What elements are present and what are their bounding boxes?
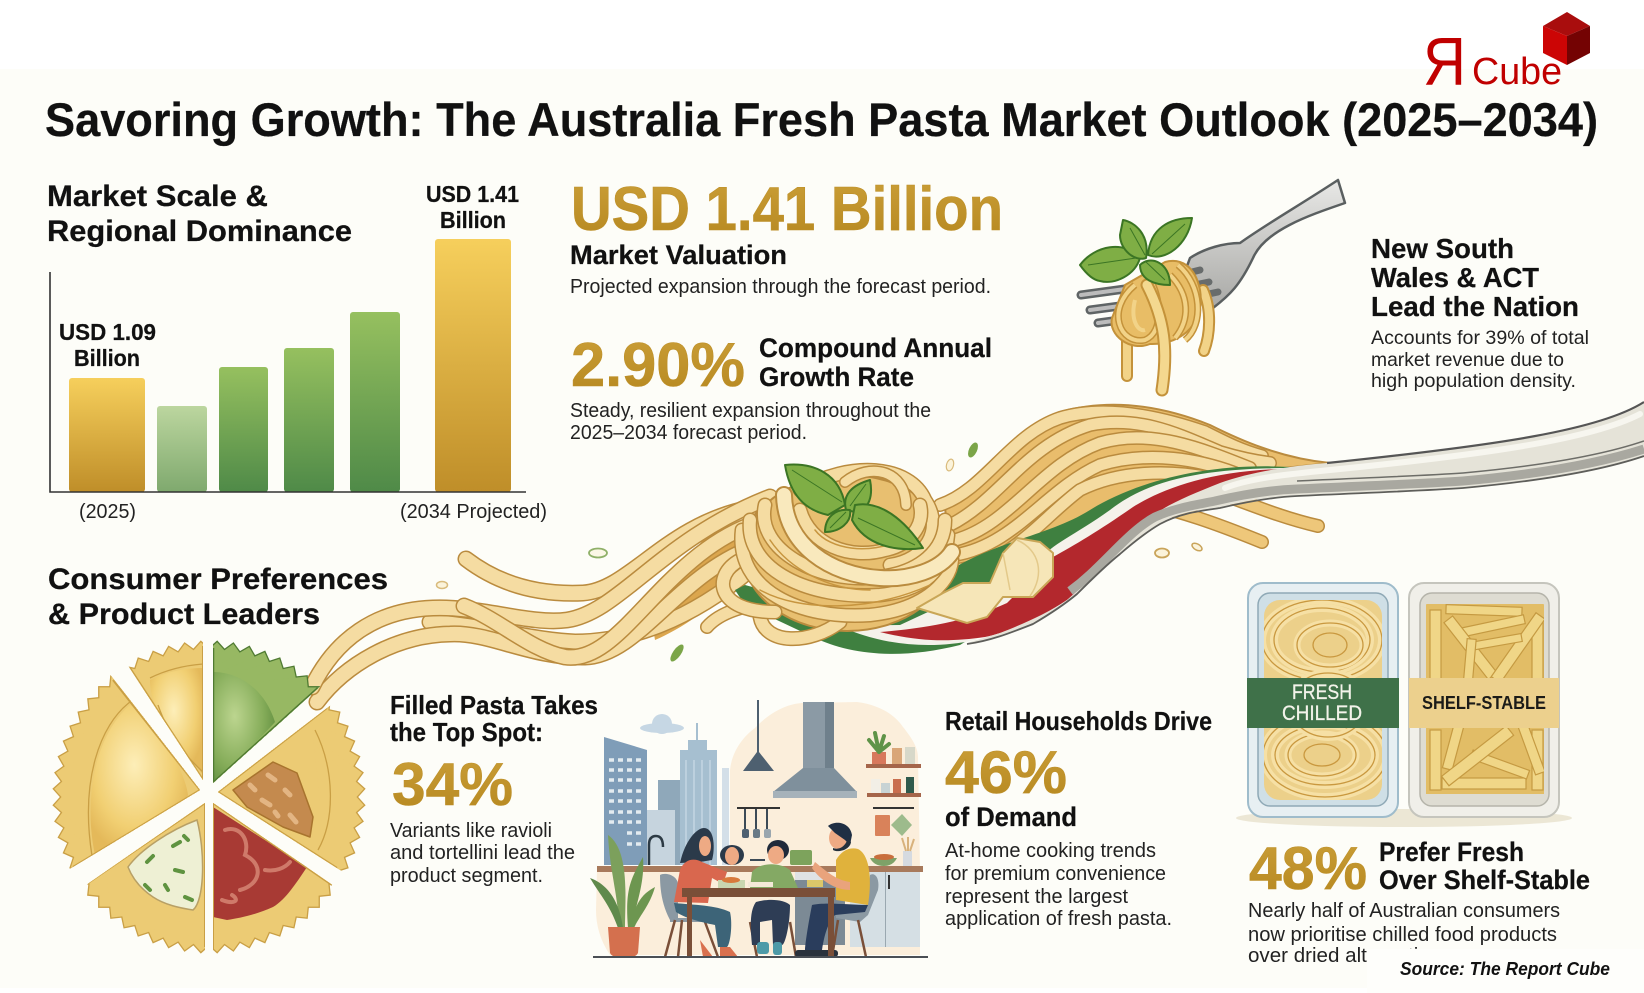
potted plant — [590, 835, 655, 957]
segment: green spinach — [213, 640, 320, 783]
text: New South Wales and ACT — [1371, 233, 1589, 392]
logo: RCube — [1423, 12, 1590, 100]
icon: basil on nest — [785, 465, 923, 549]
tray: fresh chilled: CHILLED — [1282, 702, 1362, 725]
left pasta strands — [312, 497, 780, 702]
text: New South Wales and ACT: Wales & ACT — [1371, 262, 1539, 293]
tray: shelf-stable: SHELF-STABLE — [1422, 693, 1546, 713]
bar chart: (2025) — [79, 501, 136, 523]
text: fresh preference stat: Prefer Fresh — [1379, 837, 1524, 867]
tray: shelf-stable — [1409, 583, 1559, 817]
pasta crumbs and herb flecks — [436, 441, 1203, 663]
panel: consumer preferences heading: Consumer Preferences — [48, 563, 388, 596]
tray: fresh chilled — [1247, 583, 1399, 817]
pasta nest — [723, 470, 952, 639]
city skyline — [604, 714, 729, 865]
stat: market valuation — [570, 175, 1003, 298]
text: New South Wales and ACT: Accounts for 39% of total — [1371, 327, 1589, 349]
text: fresh preference stat: over dried alternatives. — [1248, 945, 1456, 967]
shelves with jars — [866, 733, 921, 797]
segment: meat and vegetable filling — [218, 706, 366, 871]
logo: RCube: Я — [1423, 24, 1466, 100]
stat: CAGR: 2025–2034 forecast period. — [570, 422, 807, 444]
text: filled pasta stat: and tortellini lead the — [390, 842, 575, 864]
text: retail households stat: of Demand — [945, 802, 1077, 832]
kitchen wall — [596, 702, 920, 955]
text: retail households stat: represent the largest — [945, 886, 1128, 908]
person: mother — [660, 828, 738, 957]
text: fresh preference stat — [1248, 835, 1590, 967]
panel: consumer preferences heading — [48, 563, 388, 631]
text: retail households stat — [945, 706, 1212, 930]
stat: market valuation: Market Valuation — [570, 240, 787, 270]
pendant lamp — [743, 700, 774, 771]
counter and cupboards — [597, 836, 923, 947]
panel: market scale heading: Regional Dominance — [47, 215, 352, 248]
right pasta bundle — [940, 405, 1330, 580]
segment: plain left — [52, 675, 200, 869]
pasta ends under the fork — [1130, 480, 1318, 542]
stat: CAGR: Compound Annual — [759, 333, 992, 363]
source patch — [1367, 949, 1644, 993]
text: fresh preference stat: Nearly half of Australian consumers — [1248, 900, 1560, 922]
title: Savoring Growth: The Australia Fresh Pasta Market Outlook (2025–2034) — [45, 93, 1598, 146]
text: fresh preference stat: Over Shelf-Stable — [1379, 865, 1590, 895]
text: filled pasta stat: product segment. — [390, 865, 543, 887]
white ribbon — [840, 468, 1290, 645]
panel: market scale heading — [47, 180, 352, 248]
person: daughter — [720, 845, 744, 865]
logo: RCube: Cube — [1472, 51, 1562, 93]
segment: herb cheese filling — [87, 803, 205, 954]
illustration: pasta ribbon on fork flowing across the page — [312, 402, 1644, 702]
chart: ravioli pie — [52, 640, 366, 954]
text: filled pasta stat: Filled Pasta Takes — [390, 690, 598, 720]
source note: Source: The Report Cube — [1400, 958, 1610, 979]
bar chart: USD 1.41 — [426, 181, 519, 207]
bar chart: USD 1.09 — [59, 319, 156, 345]
text: fresh preference stat: now prioritise chilled food products — [1248, 924, 1557, 946]
stat: CAGR: Growth Rate — [759, 362, 914, 392]
illustration: family eating in kitchen — [590, 700, 928, 958]
text: New South Wales and ACT: market revenue due to — [1371, 349, 1564, 371]
dining table — [682, 877, 835, 957]
text: filled pasta stat: the Top Spot: — [390, 717, 543, 747]
panel: market scale heading: Market Scale & — [47, 180, 268, 213]
icon: fork with twirled spaghetti and basil — [1080, 180, 1345, 390]
text: retail households stat: Retail Households Drive — [945, 706, 1212, 736]
bar chart — [50, 181, 547, 523]
large silver fork — [967, 402, 1644, 644]
text: filled pasta stat — [390, 690, 598, 887]
text: New South Wales and ACT: Lead the Nation — [1371, 291, 1579, 322]
bar chart: Billion — [74, 345, 140, 371]
bar chart: (2034 Projected) — [400, 501, 547, 523]
range hood — [773, 702, 857, 798]
person: son — [750, 840, 798, 957]
bar chart: Billion — [440, 207, 506, 233]
text: retail households stat: At-home cooking trends — [945, 840, 1156, 862]
text: New South Wales and ACT: New South — [1371, 233, 1514, 264]
stat: market valuation: USD 1.41 Billion — [571, 175, 1003, 244]
stat: market valuation: Projected expansion through the forecast period. — [570, 276, 991, 298]
floor line — [593, 956, 928, 958]
segment: plain top-left — [128, 640, 203, 780]
panel: consumer preferences heading: & Product Leaders — [48, 598, 320, 631]
icon: fresh chilled pasta tray and shelf-stable tray — [1236, 583, 1572, 827]
segment: red meat filling — [213, 803, 332, 954]
stat: CAGR: Steady, resilient expansion throughout the — [570, 400, 931, 422]
hanging utensils — [737, 807, 914, 838]
text: retail households stat: for premium convenience — [945, 863, 1166, 885]
green ribbon — [735, 466, 1290, 654]
stat: CAGR — [570, 331, 992, 444]
pasta ribbon piece — [917, 538, 1053, 623]
stat: CAGR: 2.90% — [571, 331, 745, 400]
tray: fresh chilled: FRESH — [1292, 681, 1352, 704]
red ribbon — [880, 469, 1285, 640]
person: father — [795, 823, 878, 957]
text: retail households stat: application of fresh pasta. — [945, 908, 1172, 930]
text: filled pasta stat: 34% — [392, 751, 513, 818]
text: New South Wales and ACT: high population density. — [1371, 370, 1576, 392]
text: retail households stat: 46% — [945, 739, 1067, 806]
text: filled pasta stat: Variants like ravioli — [390, 820, 552, 842]
text: fresh preference stat: 48% — [1249, 835, 1367, 902]
